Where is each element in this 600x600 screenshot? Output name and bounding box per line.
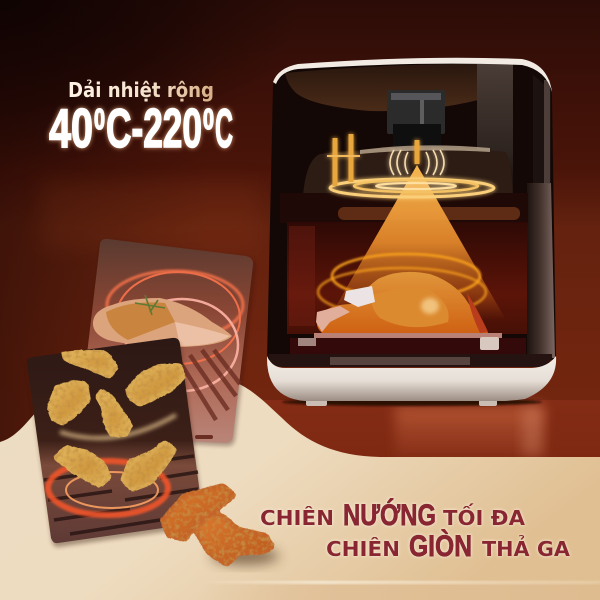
slogan line 1: CHIÊN xyxy=(260,505,334,530)
foreground fried chicken xyxy=(162,485,279,565)
motor xyxy=(387,90,445,146)
upper cavity band xyxy=(280,193,528,223)
cooking tray xyxy=(290,333,526,354)
glowing swirl xyxy=(48,415,176,515)
air fryer xyxy=(267,58,556,406)
roast chicken xyxy=(316,272,488,333)
chicken pieces xyxy=(49,352,184,490)
heating prongs xyxy=(335,134,417,186)
grill slots xyxy=(44,456,198,534)
heating coil xyxy=(327,134,494,197)
oven cavity xyxy=(287,222,527,334)
heat cone xyxy=(328,165,506,320)
swirl lines xyxy=(107,271,243,391)
fan dome xyxy=(303,147,513,196)
white base xyxy=(267,356,556,401)
temperature value xyxy=(49,97,233,159)
card: grilled salmon xyxy=(78,239,255,446)
slogan xyxy=(260,498,570,563)
rosemary xyxy=(135,295,165,315)
grill slots xyxy=(180,350,240,420)
card: fried chicken xyxy=(27,338,204,547)
slogan line 2: GIÒN xyxy=(409,529,472,563)
slogan line 2 xyxy=(326,529,570,563)
right lower glass xyxy=(527,183,555,358)
subheading: Dải nhiệt rộng xyxy=(68,78,214,102)
floor shadow xyxy=(282,398,542,406)
heat halo rings xyxy=(318,254,486,316)
slogan line 2: CHIÊN xyxy=(326,536,400,561)
ceiling xyxy=(285,64,478,111)
foil wrap xyxy=(344,286,375,307)
slogan line 2: THẢ GA xyxy=(482,534,570,561)
temperature value: 40 xyxy=(49,97,93,159)
temperature value: 0 xyxy=(94,104,105,136)
side window xyxy=(477,64,513,189)
temperature value: 0 xyxy=(203,104,214,136)
text: C xyxy=(215,97,233,159)
heading: temperature range xyxy=(49,78,233,159)
fryer feet xyxy=(306,398,497,406)
top white rim xyxy=(273,58,552,92)
glass body xyxy=(267,60,556,360)
slogan line 1: NƯỚNG xyxy=(343,498,436,532)
cream wave panel xyxy=(0,373,600,600)
slogan line 1 xyxy=(260,498,525,532)
salmon fillet xyxy=(93,298,232,347)
fan swirl arcs xyxy=(390,150,444,175)
dark lower band xyxy=(268,354,552,367)
temperature value: C-220 xyxy=(106,97,202,159)
slogan line 1: TỐI ĐA xyxy=(443,502,525,530)
